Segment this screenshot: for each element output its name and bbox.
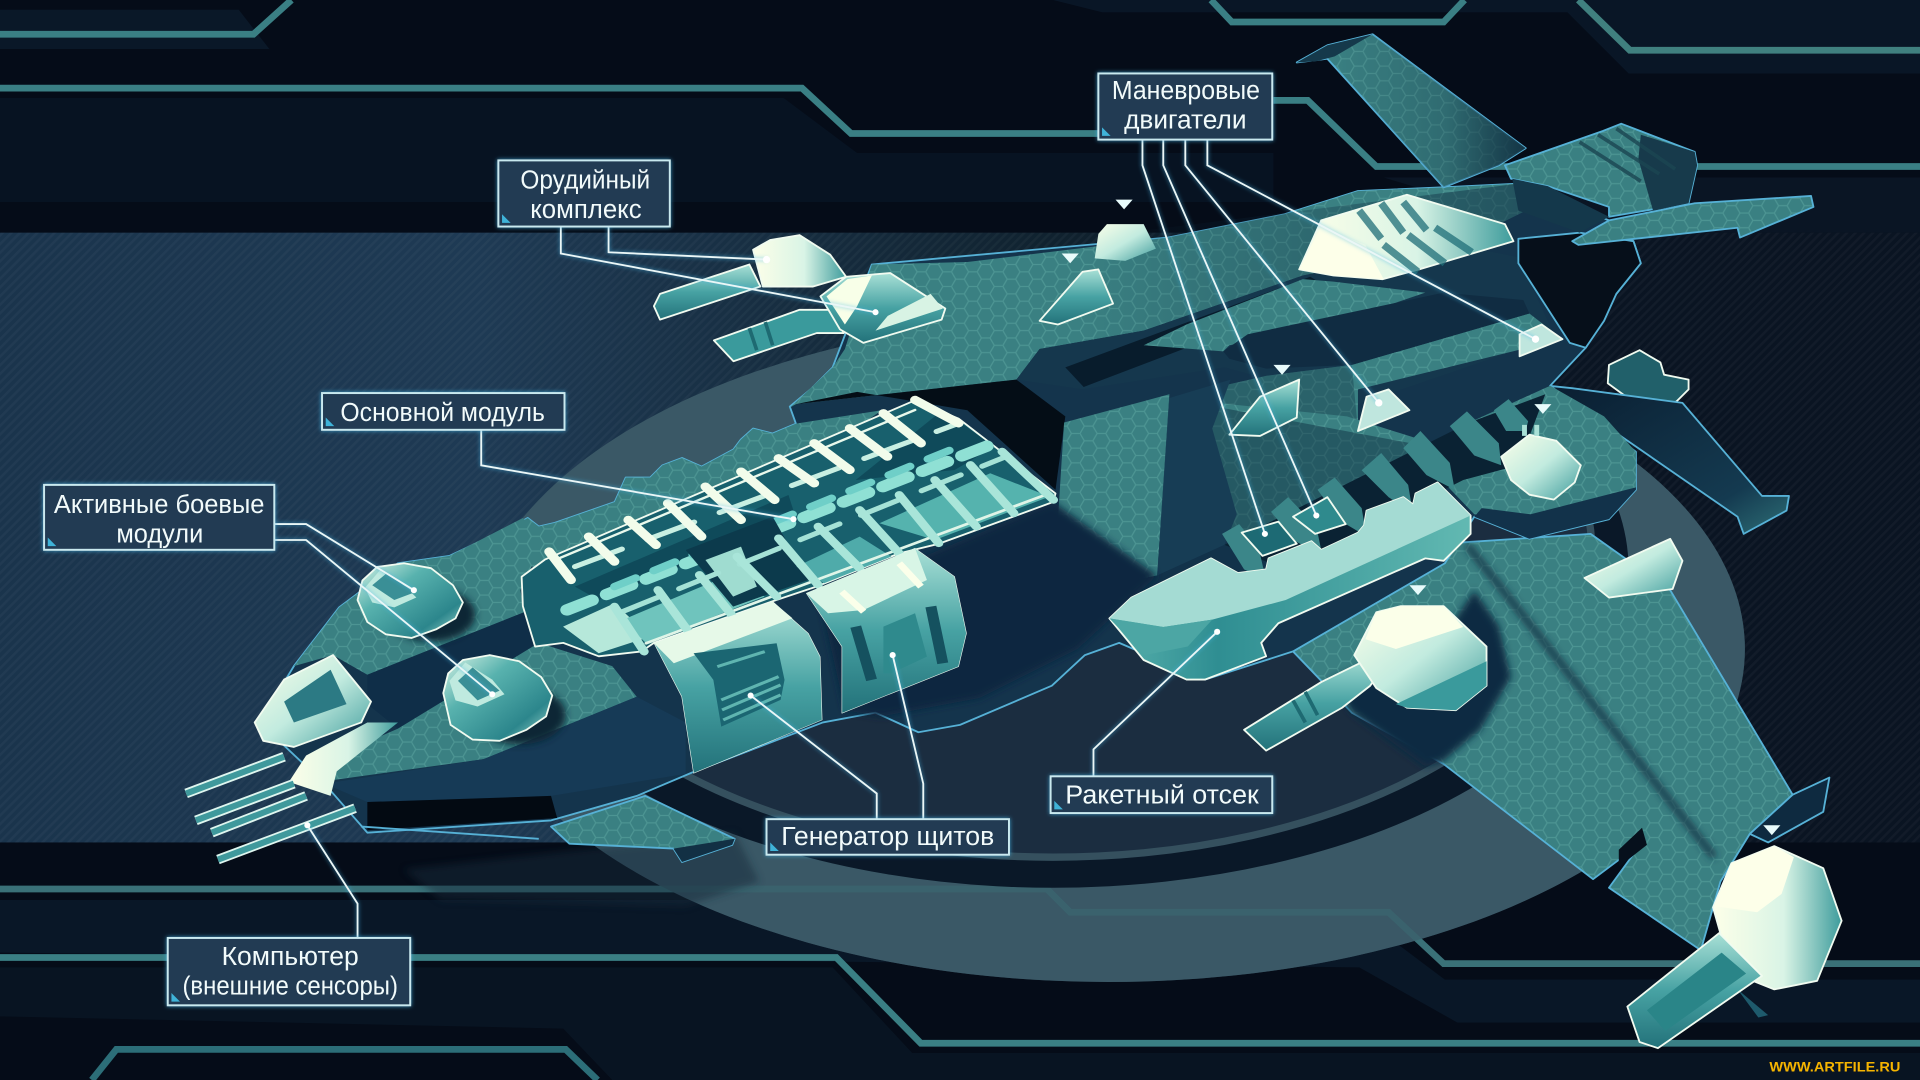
watermark: WWW.ARTFILE.RU: [1769, 1059, 1900, 1074]
direction markers: [1062, 200, 1780, 835]
callout: missile bay: [1051, 629, 1272, 813]
rear engine dark: [1518, 233, 1641, 348]
mid panel: [1053, 380, 1463, 624]
big wing: [1293, 534, 1829, 950]
callout: missile bay: Ракетный отсек: [1065, 781, 1260, 809]
callout: maneuvering thrusters: [1098, 73, 1539, 537]
upper front turret: [714, 273, 945, 361]
callout: active combat modules: [44, 485, 495, 697]
top wedge: [1040, 269, 1113, 324]
rear turret: [1627, 846, 1842, 1048]
rear deck: [1445, 386, 1636, 520]
rear deck front: [1474, 487, 1636, 539]
upper back turret: [654, 235, 846, 320]
upper deck dark shelf: [1016, 245, 1555, 404]
sensor barrels: [186, 757, 355, 860]
upper strip deck: [1144, 279, 1425, 351]
hexagon plate: [1608, 350, 1689, 407]
top fin: [1297, 34, 1526, 187]
generator 1: [654, 602, 822, 773]
thruster mounts: [1242, 497, 1346, 556]
module surround deck: [519, 410, 882, 588]
engine block: [1299, 195, 1513, 279]
platform inner rings: [595, 464, 1745, 982]
fin trench: [1224, 394, 1545, 569]
callout: maneuvering thrusters: Маневровые: [1112, 77, 1260, 105]
module rails: [549, 400, 1053, 653]
upper deck: [790, 184, 1531, 408]
thruster triangle: [1520, 324, 1562, 356]
callout: shield generator: [748, 652, 1009, 855]
callout: computer: Компьютер: [222, 943, 359, 971]
callout: active combat modules: Активные боевые: [54, 491, 264, 519]
tail box: [1505, 124, 1697, 233]
dark blob: [1223, 293, 1529, 369]
missile fins: [1222, 399, 1528, 580]
central module: [522, 400, 1056, 656]
nose block: [255, 655, 371, 747]
callout: gun complex: комплекс: [530, 196, 642, 224]
front upper deck: [294, 518, 545, 675]
wing tip: [1750, 778, 1829, 842]
dark vent strip: [1065, 277, 1335, 387]
small top turret: [1095, 224, 1156, 261]
right stabilizer: [1572, 196, 1813, 245]
thruster trapezoid: [1358, 389, 1409, 431]
front turret A: [358, 563, 475, 642]
wing fin small: [1584, 539, 1682, 598]
front groove: [367, 612, 539, 729]
callout: gun complex: [498, 160, 879, 315]
front lower hull: [324, 697, 686, 802]
callout: maneuvering thrusters: двигатели: [1124, 107, 1247, 135]
callout: computer: (внешние сенсоры): [182, 972, 398, 1000]
thruster wedge: [1229, 380, 1299, 436]
middle turret: [1244, 606, 1487, 751]
lower right fin: [1548, 386, 1789, 534]
callout: shield generator: Генератор щитов: [781, 823, 994, 851]
front turret B: [443, 655, 566, 744]
callout: active combat modules: модули: [116, 520, 203, 548]
callout: main module: Основной модуль: [340, 399, 545, 427]
mid hull dark shadow: [820, 502, 1157, 716]
callout: main module: [322, 393, 797, 522]
missile bay: [1109, 482, 1471, 680]
generator 2: [806, 548, 966, 713]
callout: gun complex: Орудийный: [520, 167, 650, 195]
nose tip: [288, 722, 398, 796]
ship shadow: [404, 833, 759, 906]
black underside: [796, 380, 1065, 490]
callout: computer: [168, 822, 410, 1005]
front lower deck: [324, 643, 637, 781]
dorsal small turret: [1501, 425, 1581, 500]
ventral fin: [551, 796, 735, 862]
platform ellipse: [471, 316, 1745, 982]
centre deck: [1174, 313, 1562, 441]
shield generators: [654, 548, 966, 773]
hull silhouette: [260, 184, 1641, 833]
